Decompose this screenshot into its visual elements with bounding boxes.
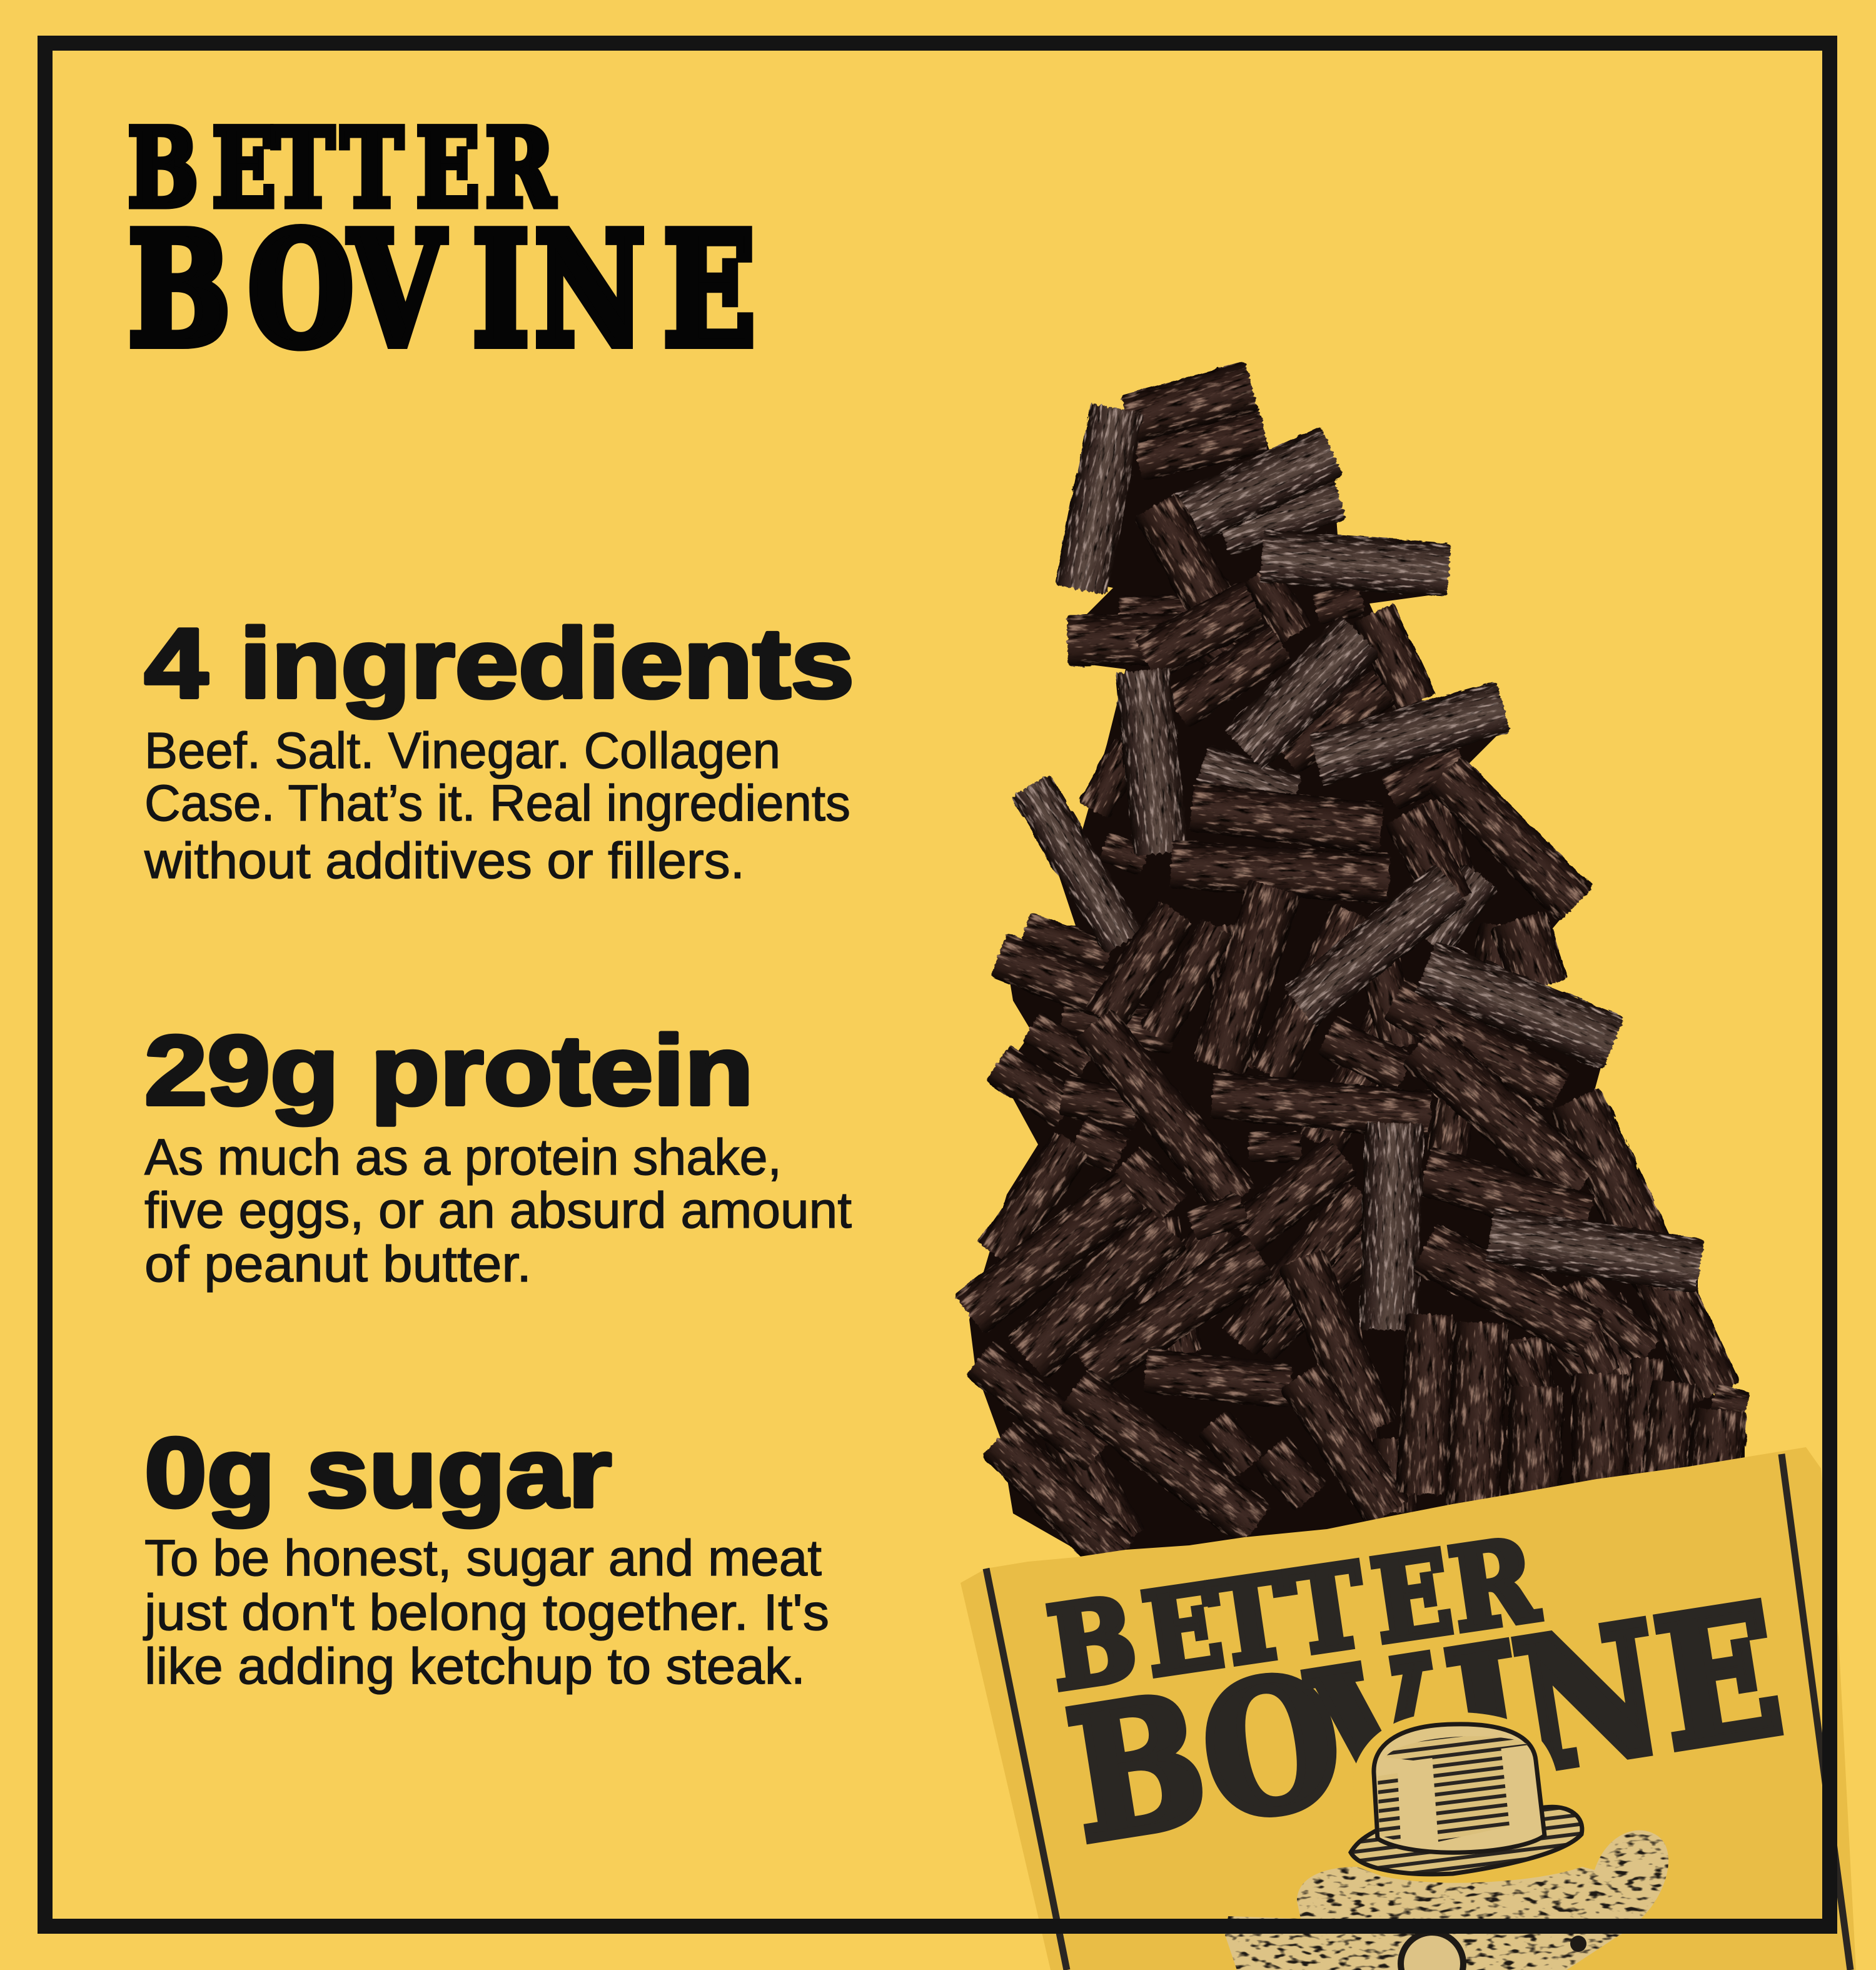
- heading: 0g sugar: [144, 1418, 612, 1528]
- hat brim: [1351, 1807, 1582, 1874]
- section: 0g sugar: [143, 1418, 829, 1695]
- bag body: [961, 1447, 1856, 1970]
- hat crown: [1374, 1724, 1545, 1852]
- hat crown shading: [1432, 1746, 1510, 1842]
- hat crown left shading: [1378, 1773, 1401, 1842]
- body text: five eggs, or an absurd amount: [144, 1182, 852, 1239]
- logo word: better: BETTER: [128, 105, 556, 231]
- bag word: bovine: BOVINE: [1057, 1565, 1793, 1882]
- bag left rule: [986, 1568, 1067, 1970]
- hat crown top shading: [1385, 1736, 1529, 1760]
- heading: 29g protein: [144, 1016, 754, 1126]
- body text: just don't belong together. It's: [143, 1584, 829, 1641]
- body text: [144, 1129, 852, 1293]
- bag right rule: [1782, 1454, 1850, 1970]
- pile shadow silhouette: [969, 369, 1745, 1563]
- logo word: bovine: BOVINE: [128, 199, 755, 381]
- section: 4 ingredients: [144, 609, 854, 889]
- bull illustration: [1225, 1724, 1668, 1970]
- back layer filler: [1299, 992, 1421, 1156]
- bag: [961, 1447, 1856, 1970]
- logo: [128, 105, 755, 381]
- heading: 4 ingredients: [144, 609, 854, 719]
- body text: [144, 722, 850, 889]
- body text: like adding ketchup to steak.: [144, 1638, 805, 1695]
- hat halo: [1351, 1712, 1563, 1870]
- body text: As much as a protein shake,: [144, 1129, 782, 1186]
- body text: of peanut butter.: [144, 1236, 532, 1293]
- bull head: [1225, 1831, 1668, 1970]
- body text: Beef. Salt. Vinegar. Collagen: [144, 722, 780, 779]
- jerky pile: [954, 361, 1750, 1575]
- body text: [143, 1530, 829, 1695]
- body text: To be honest, sugar and meat: [144, 1530, 822, 1587]
- eye: [1570, 1936, 1586, 1952]
- monocle: [1401, 1932, 1463, 1970]
- bag word: better: BETTER: [1041, 1513, 1545, 1716]
- section: 29g protein: [144, 1016, 852, 1293]
- body text: Case. That’s it. Real ingredients: [144, 775, 850, 832]
- body text: without additives or fillers.: [144, 832, 745, 889]
